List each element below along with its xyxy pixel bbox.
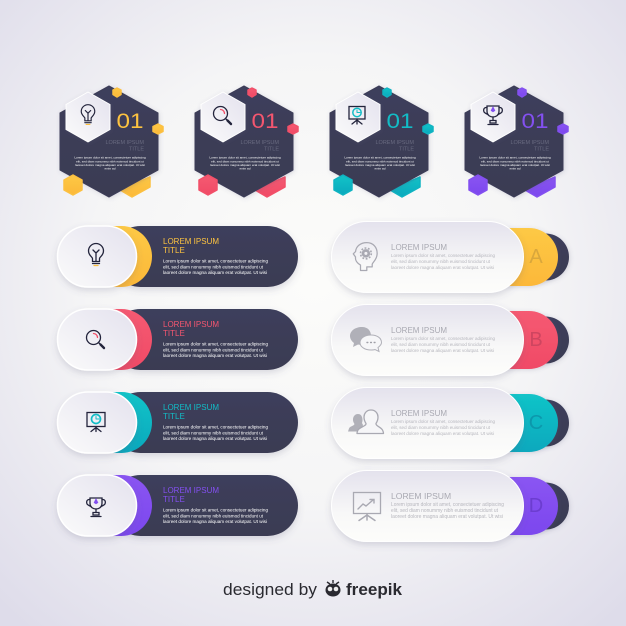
body text: Lorem ipsum dolor sit amet, consectetuer adipiscing xyxy=(391,502,504,508)
panel: hexagon card 1: TITLE xyxy=(129,146,144,152)
body text xyxy=(74,156,146,171)
small hexagons xyxy=(64,88,163,195)
purple tab xyxy=(480,477,558,535)
heading: TITLE xyxy=(163,412,185,421)
body text: elit, sed diam nonummy nibh euismod tincidunt ut xyxy=(391,425,491,430)
body text: laoreet dolore magna aliquam erat volutpat. Ut wisi xyxy=(163,270,267,275)
body text: laoreet dolore magna aliquam erat volutpat. Ut wisi xyxy=(163,436,267,441)
icon: magnifier xyxy=(86,330,104,348)
body text: laoreet dolore magna aliquam erat volutpat. Ut wisi xyxy=(391,514,503,520)
white hexagon xyxy=(201,92,245,142)
body text: enim ad xyxy=(509,167,521,171)
letter: C xyxy=(529,412,543,434)
body text xyxy=(391,336,495,353)
body text: elit, sed diam nonummy nibh euismod tincidunt ut xyxy=(391,259,491,264)
icon: chart board xyxy=(354,492,380,520)
body text: elit, sed diam nonummy nibh euismod tincidunt ut xyxy=(76,159,144,163)
heading: LOREM IPSUM xyxy=(391,326,447,335)
heading: LOREM IPSUM xyxy=(163,320,219,329)
heading: LOREM IPSUM xyxy=(391,409,447,418)
white hexagon xyxy=(66,92,110,142)
footer: designed by freepik: freepik xyxy=(346,580,403,599)
dark hexagon xyxy=(330,86,428,197)
panel: left pill 1 xyxy=(58,226,298,287)
footer: designed by freepik xyxy=(223,580,403,599)
body text: Lorem ipsum dolor sit amet, consectetuer adipiscing xyxy=(163,258,268,264)
body text: Lorem ipsum dolor sit amet, consectetuer adipiscing xyxy=(74,156,146,160)
heading: TITLE xyxy=(163,329,185,338)
accent behind hexagon xyxy=(255,177,285,197)
white pill xyxy=(332,388,524,458)
heading: LOREM IPSUM xyxy=(391,243,447,252)
icon: magnifier xyxy=(214,106,231,124)
white pill xyxy=(58,392,136,453)
dark pill xyxy=(110,309,298,370)
small hexagons xyxy=(334,88,433,195)
small hexagons xyxy=(469,88,568,195)
panel: left pill 4 xyxy=(58,475,298,536)
icon: people xyxy=(348,410,384,434)
teal tab xyxy=(480,394,558,452)
panel: left pill 3 xyxy=(58,392,298,453)
dark circle xyxy=(510,234,569,280)
white pill xyxy=(58,226,136,287)
dark pill xyxy=(110,226,298,287)
icon: chat bubbles xyxy=(350,327,382,352)
heading: LOREM IPSUM xyxy=(163,403,219,412)
body text xyxy=(479,156,551,171)
body text: Lorem ipsum dolor sit amet, consectetuer adipiscing xyxy=(391,419,495,424)
dark pill xyxy=(110,475,298,536)
body text: elit, sed diam nonummy nibh euismod tincidunt ut xyxy=(391,342,491,347)
body text: laoreet dolore magna aliquam erat volutpat. Ut wisi xyxy=(75,163,145,167)
panel: hexagon card 3 xyxy=(330,86,433,197)
panel: hexagon card 2 xyxy=(195,86,298,197)
body text: enim ad xyxy=(374,167,386,171)
number: 01 xyxy=(386,110,414,133)
heading: LOREM IPSUM xyxy=(163,237,219,246)
icon: light bulb xyxy=(81,105,95,124)
body text xyxy=(391,502,504,520)
number: 01 xyxy=(116,110,144,133)
body text: Lorem ipsum dolor sit amet, consectetuer adipiscing xyxy=(163,508,268,512)
body text: Lorem ipsum dolor sit amet, consectetuer adipiscing xyxy=(391,253,495,258)
body text: laoreet dolore magna aliquam erat volutpat. Ut wisi xyxy=(345,163,415,167)
letter: D xyxy=(529,495,543,517)
body text: Lorem ipsum dolor sit amet, consectetuer adipiscing xyxy=(163,424,268,430)
body text: elit, sed diam nonummy nibh euismod tincidunt ut xyxy=(163,513,264,518)
body text xyxy=(391,419,495,436)
accent behind hexagon xyxy=(390,177,420,197)
white pill xyxy=(332,304,524,376)
white pill xyxy=(332,222,524,292)
body text: laoreet dolore magna aliquam erat volutpat. Ut wisi xyxy=(391,265,494,270)
body text: laoreet dolore magna aliquam erat volutpat. Ut wisi xyxy=(391,348,494,353)
white pill xyxy=(58,309,136,370)
dark circle xyxy=(510,400,569,446)
body text: Lorem ipsum dolor sit amet, consectetuer adipiscing xyxy=(163,342,268,346)
small hexagons xyxy=(199,88,298,195)
panel: right pill A xyxy=(332,222,569,292)
pink tab xyxy=(480,311,558,369)
icon: presentation board xyxy=(87,412,105,432)
body text: Lorem ipsum dolor sit amet, consectetuer adipiscing xyxy=(391,336,495,341)
white hexagon xyxy=(336,92,380,142)
panel: hexagon card 4: TITLE xyxy=(534,146,549,152)
white pill xyxy=(58,475,136,536)
dark circle xyxy=(510,482,569,530)
white pill xyxy=(332,470,524,542)
purple tab xyxy=(70,475,152,536)
body text: Lorem ipsum dolor sit amet, consectetuer adipiscing xyxy=(344,156,416,160)
letter: B xyxy=(529,329,543,351)
body text xyxy=(163,424,268,441)
body text: enim ad xyxy=(239,167,251,171)
yellow tab xyxy=(480,228,558,286)
body text: enim ad xyxy=(104,167,116,171)
body text: elit, sed diam nonummy nibh euismod tincidunt ut xyxy=(163,264,264,269)
body text: elit, sed diam nonummy nibh euismod tincidunt ut xyxy=(163,430,264,435)
accent behind hexagon xyxy=(120,177,150,197)
icon: trophy xyxy=(484,106,502,124)
panel: hexagon card 3: TITLE xyxy=(399,146,414,152)
body text xyxy=(209,156,281,171)
icon: freepik logo xyxy=(326,580,340,596)
body text: laoreet dolore magna aliquam erat volutpat. Ut wisi xyxy=(163,353,267,358)
body text: elit, sed diam nonummy nibh euismod tincidunt ut xyxy=(211,159,279,163)
letter: A xyxy=(529,246,543,268)
heading: LOREM IPSUM xyxy=(510,140,549,146)
dark hexagon xyxy=(465,86,563,197)
footer: designed by freepik: designed by xyxy=(223,581,318,599)
body text xyxy=(163,258,268,275)
panel: right pill B xyxy=(332,304,569,376)
teal tab xyxy=(70,392,152,453)
icon: trophy xyxy=(87,498,105,516)
icon: light bulb xyxy=(88,244,104,266)
body text: laoreet dolore magna aliquam erat volutpat. Ut wisi xyxy=(163,519,267,524)
dark hexagon xyxy=(195,86,293,197)
number: 01 xyxy=(522,110,548,133)
yellow tab xyxy=(70,226,152,287)
heading: TITLE xyxy=(163,495,185,504)
heading: LOREM IPSUM xyxy=(163,486,219,495)
body text: laoreet dolore magna aliquam erat volutpat. Ut wisi xyxy=(210,163,280,167)
accent behind hexagon xyxy=(525,177,555,197)
body text: laoreet dolore magna aliquam erat volutpat. Ut wisi xyxy=(391,431,494,436)
body text xyxy=(163,342,268,358)
body text: elit, sed diam nonummy nibh euismod tincidunt ut xyxy=(481,159,549,163)
dark circle xyxy=(510,316,569,364)
panel: right pill C xyxy=(332,388,569,458)
heading: LOREM IPSUM xyxy=(105,140,144,146)
pink tab xyxy=(70,309,152,370)
body text: elit, sed diam nonummy nibh euismod tincidunt ut xyxy=(391,508,499,514)
heading: TITLE xyxy=(163,246,185,255)
panel: hexagon card 1 xyxy=(60,86,163,197)
body text: elit, sed diam nonummy nibh euismod tincidunt ut xyxy=(163,347,264,352)
heading: LOREM IPSUM xyxy=(375,140,414,146)
body text: Lorem ipsum dolor sit amet, consectetuer adipiscing xyxy=(479,156,551,160)
dark pill xyxy=(110,392,298,453)
white hexagon xyxy=(471,92,515,142)
panel: left pill 2 xyxy=(58,309,298,370)
panel: right pill D xyxy=(332,470,569,542)
icon: head with gear xyxy=(353,243,377,270)
panel: hexagon card 2: TITLE xyxy=(264,146,279,152)
heading: LOREM IPSUM xyxy=(391,491,451,501)
body text: elit, sed diam nonummy nibh euismod tincidunt ut xyxy=(346,159,414,163)
dark hexagon xyxy=(60,86,158,197)
body text: laoreet dolore magna aliquam erat volutpat. Ut wisi xyxy=(480,163,550,167)
panel: hexagon card 4 xyxy=(465,86,568,197)
body text xyxy=(391,253,495,270)
body text xyxy=(163,508,268,524)
number: 01 xyxy=(252,110,278,133)
body text: Lorem ipsum dolor sit amet, consectetuer adipiscing xyxy=(209,156,281,160)
heading: LOREM IPSUM xyxy=(240,140,279,146)
icon: presentation board xyxy=(349,106,365,124)
body text xyxy=(344,156,416,171)
